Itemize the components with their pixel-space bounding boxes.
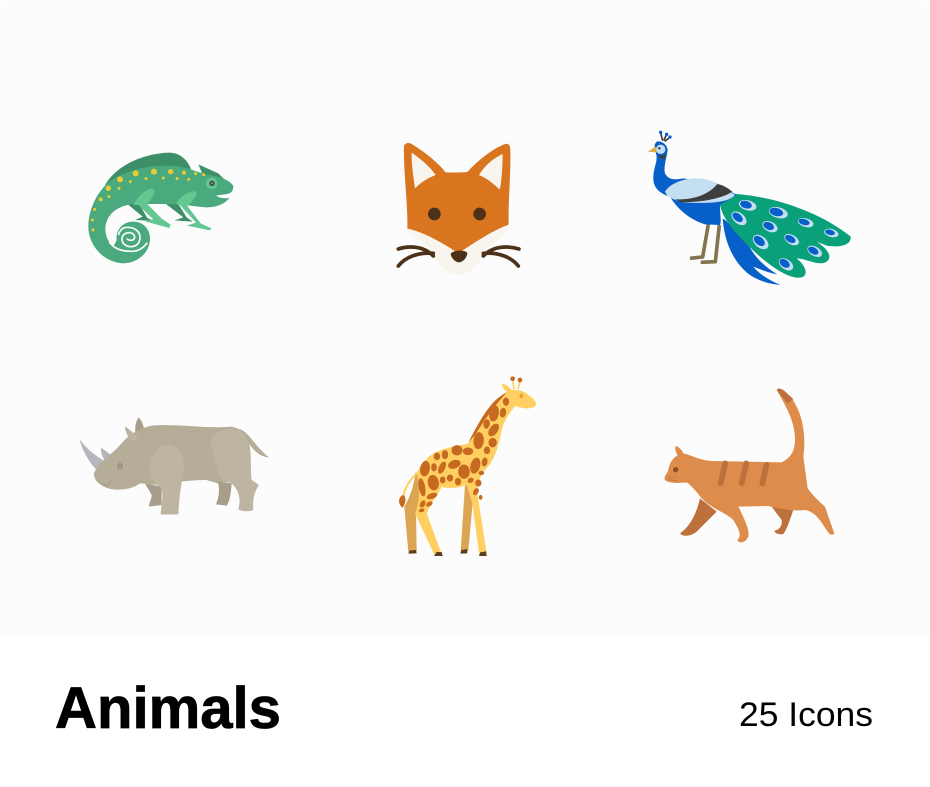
icon count: 25 Icons [739,696,873,734]
title: Animals [55,676,281,741]
icon: fox [398,143,519,275]
icon: cat [665,388,834,542]
icon: giraffe [399,376,536,556]
icon: chameleon [88,153,233,263]
icon: rhino [79,417,269,514]
icon: peacock [648,131,851,285]
